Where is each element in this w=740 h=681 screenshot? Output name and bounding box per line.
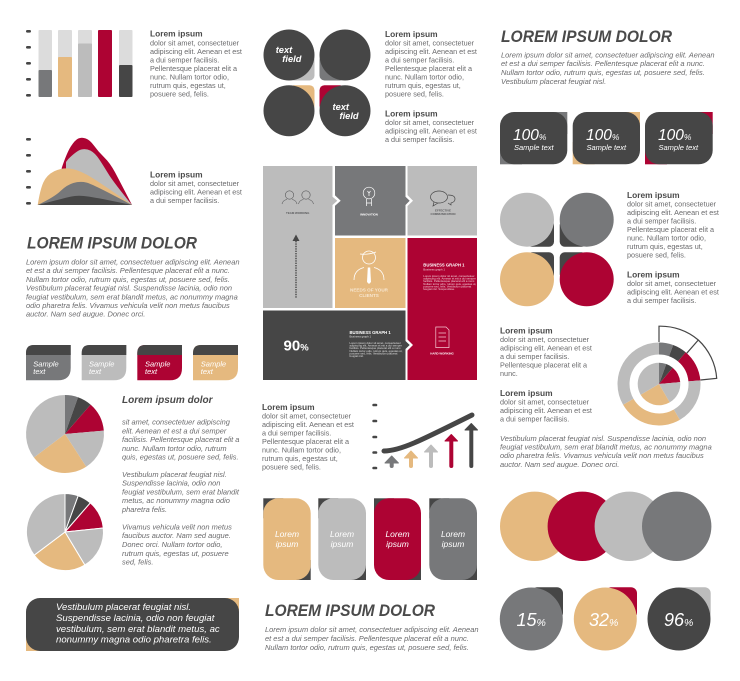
text block: growth chart description: dolor sit amet, consectetuer: [262, 412, 352, 420]
panel: process grid: [263, 166, 477, 380]
heading: top right title: LOREM IPSUM DOLOR: [501, 27, 672, 46]
text block: italic note: auctor. Nam sed augue. Donec orci.: [500, 460, 619, 469]
panel: business graph red: facilisis. Pellentesque placerat elit a nunc.: [423, 279, 475, 283]
panel: business graph red: Business graph 1: [423, 268, 445, 272]
sample text tabs: text: [33, 367, 46, 376]
sample text tabs: Sample: [201, 360, 226, 368]
arrow: team working to innovation: [332, 193, 341, 208]
text block: coloured circles description: dolor sit amet, consectetuer: [627, 200, 717, 208]
rounded lorem ipsum cards: Lorem: [385, 529, 410, 539]
sample text tabs: text: [201, 367, 214, 376]
four coloured circles: [500, 193, 614, 306]
text block: pie chart notes: nunc. Nullam tortor odio, rutrum: [122, 444, 227, 453]
panel: 90 percent: BUSINESS GRAPH 1: [350, 330, 391, 335]
text block: left paragraph: feugiat vestibulum, sem erat blandit metus, ac nonummy magna: [26, 292, 238, 301]
panel: 90 percent: Nullam tortor odio, rutrum quis, egestas ut,: [350, 349, 403, 353]
growth arrows chart: [372, 404, 478, 469]
panel: business graph red: Lorem ipsum dolor sit amet, consectetuer: [423, 274, 475, 278]
sample text tabs: Sample: [145, 360, 170, 368]
heading: bottom title: LOREM IPSUM DOLOR: [265, 601, 435, 620]
rounded lorem ipsum cards: Lorem: [275, 529, 299, 539]
text block: pie chart notes: Lorem ipsum dolor: [122, 395, 214, 406]
four dark circles: [264, 30, 370, 136]
text block: circles description: Lorem ipsum: [385, 29, 438, 39]
text block: pie chart notes: metus, ac nonummy magna odio: [122, 496, 230, 505]
text block: italic note: Vestibulum placerat feugiat nisl. Suspendisse lacinia, odio non: [500, 434, 706, 443]
text block: circles description: a dui semper facilisis.: [385, 135, 454, 144]
text block: top right paragraph: Lorem ipsum dolor sit amet, consectetuer adipiscing elit. Aenean: [501, 50, 715, 60]
text block: pie chart notes: Donec orci. Nullam tortor odio,: [122, 540, 222, 549]
percentage circles: [500, 587, 711, 650]
text block: bottom paragraph: et est a dui semper facilisis. Pellentesque placerat elit a nunc.: [265, 634, 469, 643]
text block: circles description: a dui semper facilisis.: [385, 56, 454, 64]
four dark circles: text: [332, 102, 350, 112]
heading: left title: LOREM IPSUM DOLOR: [27, 234, 197, 252]
panel: needs of your clients: [335, 238, 406, 308]
panel: team working: [263, 166, 332, 308]
stat tiles: 100 percent: Sample text: [586, 143, 627, 152]
text block: bar chart description: posuere sed, felis.: [150, 90, 209, 98]
stat tiles: 100 percent: 100%: [658, 127, 692, 144]
text block: coloured circles description: Lorem ipsum: [627, 190, 680, 200]
text block: pie chart notes: Vestibulum placerat feugiat nisl.: [122, 470, 227, 479]
pie chart: separated slices: [26, 493, 104, 571]
text block: bottom paragraph: Lorem ipsum dolor sit amet, consectetuer adipiscing elit. Aenean: [265, 625, 479, 634]
text block: bottom paragraph: Nullam tortor odio, rutrum quis, egestas ut, posuere sed, felis.: [265, 643, 469, 652]
text block: top right paragraph: Nullam tortor odio, rutrum quis, egestas ut, posuere sed, felis.: [501, 68, 705, 77]
stat tiles: 100 percent: [500, 112, 713, 164]
text block: top right paragraph: Vestibulum placerat feugiat nisl.: [501, 77, 606, 86]
text block: bottom paragraph: [265, 625, 479, 652]
text block: bar chart description: a dui semper facilisis.: [150, 56, 219, 64]
text block: area chart description: a dui semper facilisis.: [150, 196, 219, 205]
panel: business graph red: feugiat nisl. Suspendisse.: [423, 287, 455, 291]
text block: coloured circles description: adipiscing elit. Aenean et est: [627, 208, 719, 217]
panel: business graph red: BUSINESS GRAPH 1: [423, 263, 465, 268]
text block: coloured circles description: posuere sed, felis.: [627, 250, 686, 260]
text block: pie chart notes: facilisis. Pellentesque placerat elit a: [122, 435, 239, 444]
stat tiles: 100 percent: 100%: [586, 127, 620, 144]
panel: innovation: INNOVATION: [360, 212, 378, 216]
text block: left paragraph: [26, 257, 240, 319]
text block: left paragraph: Nullam tortor odio, rutrum quis, egestas ut, posuere sed, felis.: [26, 275, 230, 284]
text block: circles description: Pellentesque placerat elit a: [385, 64, 473, 73]
panel: business graph red: [408, 238, 477, 380]
text block: coloured circles description: rutrum quis, egestas ut,: [627, 242, 703, 251]
text block: circles description: rutrum quis, egestas ut,: [385, 81, 461, 90]
text block: growth chart description: a dui semper facilisis.: [262, 428, 331, 438]
text block: growth chart description: adipiscing elit. Aenean et est: [262, 420, 354, 429]
text block: bar chart description: Pellentesque placerat elit a: [150, 64, 238, 73]
percentage circles: 96%: [664, 610, 693, 630]
text block: pie chart notes: elit. Aenean et est a dui semper: [122, 426, 227, 435]
text block: bar chart description: [150, 28, 242, 98]
text block: growth chart description: posuere sed, felis.: [262, 462, 321, 472]
panel: 90 percent: Lorem ipsum dolor sit amet, consectetuer: [350, 341, 401, 345]
text block: bar chart description: rutrum quis, egestas ut,: [150, 81, 226, 90]
stat tiles: 100 percent: 100%: [513, 127, 547, 144]
text block: circles description: adipiscing elit. Aenean et est: [385, 126, 477, 136]
text block: pie chart notes: rutrum quis, egestas ut, posuere: [122, 549, 229, 558]
rounded lorem ipsum cards: Lorem: [330, 529, 354, 539]
panel: business graph red: posuere sed, felis. Vestibulum placerat: [423, 284, 471, 288]
callout: dark pill: [26, 598, 239, 651]
panel: needs of your clients: NEEDS OF YOUR: [350, 288, 389, 292]
callout: dark pill: nonummy magna odio pharetra felis.: [56, 635, 212, 646]
text block: pie chart notes: faucibus auctor. Nam sed augue.: [122, 531, 231, 540]
four dark circles: text: [276, 45, 293, 55]
text block: donut description: dolor sit amet, consectetuer: [500, 398, 590, 406]
text block: growth chart description: Pellentesque placerat elit a: [262, 437, 350, 446]
text block: circles description: dolor sit amet, consectetuer: [385, 118, 475, 127]
pie chart: solid: [26, 395, 104, 473]
text block: pie chart notes: Vivamus vehicula velit non metus: [122, 522, 232, 531]
text block: donut description: a dui semper facilisis.: [500, 352, 569, 361]
text block: area chart description: Lorem ipsum: [150, 170, 203, 180]
four dark circles: field: [282, 54, 302, 64]
callout: dark pill: Vestibulum placerat feugiat nisl.: [56, 602, 191, 613]
text block: circles description: posuere sed, felis.: [385, 90, 444, 98]
text block: coloured circles description: dolor sit amet, consectetuer: [627, 279, 717, 288]
text block: pie chart notes: Suspendisse lacinia, odio non: [122, 479, 220, 488]
text block: bar chart description: dolor sit amet, consectetuer: [150, 38, 240, 48]
callout: dark pill: Suspendisse lacinia, odio non feugiat: [56, 613, 215, 624]
text block: donut description: Pellentesque placerat elit a: [500, 360, 588, 370]
panel: business graph red: HARD WORKING: [430, 352, 454, 356]
panel: effective communication: [408, 166, 477, 236]
text block: area chart description: adipiscing elit. Aenean et est: [150, 188, 242, 196]
panel: 90 percent: adipiscing elit. Aenean et est a dui semper: [350, 344, 402, 348]
panel: 90 percent: 90%: [284, 338, 309, 354]
text block: growth chart description: nunc. Nullam tortor odio,: [262, 446, 341, 454]
panel: business graph red: Nullam tortor odio, rutrum quis, egestas ut,: [423, 282, 476, 286]
panel: innovation: [335, 166, 406, 236]
text block: growth chart description: rutrum quis, egestas ut,: [262, 454, 338, 463]
rounded lorem ipsum cards: ipsum: [331, 539, 353, 549]
percentage circles: 32%: [589, 610, 618, 630]
text block: donut description: dolor sit amet, consectetuer: [500, 335, 590, 344]
text block: italic note: odio pharetra felis. Vivamus vehicula velit non metus faucibus: [500, 451, 704, 460]
bar chart: [26, 30, 132, 97]
panel: effective communication: COMMUNICATION: [430, 212, 456, 216]
text block: left paragraph: Lorem ipsum dolor sit amet, consectetuer adipiscing elit. Aenean: [26, 257, 240, 266]
text block: pie chart notes: feugiat vestibulum, sem erat blandit: [122, 487, 240, 496]
text block: circles description: dolor sit amet, consectetuer: [385, 38, 475, 48]
text block: pie chart notes: [121, 395, 240, 567]
text block: pie chart notes: pharetra felis.: [121, 505, 167, 514]
text block: left paragraph: odio pharetra felis. Vivamus vehicula velit non metus faucibus: [26, 301, 230, 310]
sample text tabs: Sample: [33, 360, 59, 368]
text block: donut description: Lorem ipsum: [500, 388, 553, 398]
rounded lorem ipsum cards: ipsum: [386, 539, 409, 549]
sample text tabs: text: [89, 367, 102, 376]
sample text tabs: [26, 345, 238, 380]
sample text tabs: text: [145, 367, 158, 376]
text block: left paragraph: Vestibulum placerat feugiat nisl. Suspendisse lacinia, odio non: [26, 284, 232, 293]
text block: pie chart notes: sit amet, consectetuer adipiscing: [122, 418, 231, 426]
callout: dark pill: vestibulum, sem erat blandit metus, ac: [56, 624, 220, 635]
text block: italic note: [500, 434, 712, 469]
text block: circles description: Lorem ipsum: [385, 108, 438, 118]
donut chart: [624, 326, 717, 419]
text block: pie chart notes: sed, felis.: [122, 558, 153, 567]
panel: business graph red: adipiscing elit. Aenean et est a dui semper: [423, 277, 476, 281]
rounded lorem ipsum cards: ipsum: [276, 539, 298, 549]
text block: top right paragraph: et est a dui semper facilisis. Pellentesque placerat elit a nunc.: [501, 59, 705, 68]
text block: donut description: adipiscing elit. Aenean et est: [500, 344, 592, 352]
text block: donut description: Lorem ipsum: [500, 326, 553, 336]
text block: bar chart description: nunc. Nullam tortor odio,: [150, 72, 229, 82]
text block: growth chart description: Lorem ipsum: [262, 402, 315, 412]
percentage circles: 15%: [516, 610, 546, 630]
text block: coloured circles description: a dui semper facilisis.: [627, 296, 696, 305]
text block: pie chart notes: quis, egestas ut, posuere sed, felis.: [122, 453, 239, 462]
panel: 90 percent: [263, 310, 406, 380]
rounded lorem ipsum cards: [263, 498, 477, 580]
stat tiles: 100 percent: Sample text: [514, 143, 555, 152]
text block: bar chart description: Lorem ipsum: [150, 28, 203, 38]
text block: coloured circles description: Pellentesque placerat elit a: [627, 225, 715, 234]
text block: growth chart description: [262, 402, 354, 472]
text block: left paragraph: et est a dui semper facilisis. Pellentesque placerat elit a nunc.: [26, 266, 230, 275]
text block: donut description: a dui semper facilisis.: [500, 414, 569, 424]
text block: circles description: [385, 29, 477, 144]
area chart: [26, 138, 132, 205]
text block: donut description: adipiscing elit. Aenean et est: [500, 406, 592, 415]
four dark circles: field: [340, 111, 359, 121]
text block: coloured circles description: nunc. Nullam tortor odio,: [627, 234, 706, 242]
text block: bar chart description: adipiscing elit. Aenean et est: [150, 47, 242, 56]
sample text tabs: Sample: [89, 360, 114, 368]
text block: donut description: nunc.: [500, 369, 518, 378]
overlapping circles: [500, 492, 711, 561]
text block: area chart description: [150, 170, 242, 205]
text block: coloured circles description: adipiscing elit. Aenean et est: [627, 288, 719, 296]
text block: italic note: feugiat vestibulum, sem erat blandit metus, ac nonummy magna: [500, 443, 712, 452]
text block: donut description: [500, 326, 592, 424]
rounded lorem ipsum cards: Lorem: [441, 529, 465, 539]
panel: 90 percent: Business graph 1: [350, 334, 372, 338]
text block: circles description: adipiscing elit. Aenean et est: [385, 47, 477, 56]
text block: top right paragraph: [501, 50, 715, 86]
arrow: 90 percent to business graph: [406, 338, 413, 352]
panel: 90 percent: facilisis. Pellentesque placerat elit a nunc.: [350, 346, 401, 350]
text block: circles description: nunc. Nullam tortor odio,: [385, 72, 464, 82]
text block: coloured circles description: [627, 190, 719, 305]
panel: 90 percent: feugiat nisl.: [350, 354, 364, 358]
arrow: innovation to communication: [406, 193, 413, 208]
text block: left paragraph: auctor. Nam sed augue. Donec orci.: [26, 310, 145, 319]
text block: coloured circles description: Lorem ipsum: [627, 270, 680, 280]
panel: effective communication: EFFECTIVE: [435, 208, 451, 212]
rounded lorem ipsum cards: ipsum: [442, 539, 464, 549]
text block: coloured circles description: a dui semper facilisis.: [627, 216, 696, 226]
panel: needs of your clients: CLIENTS: [359, 293, 379, 298]
panel: team working: TEAM WORKING: [286, 211, 310, 215]
panel: 90 percent: posuere sed, felis. Vestibulum placerat: [350, 351, 398, 355]
stat tiles: 100 percent: Sample text: [658, 143, 699, 152]
text block: area chart description: dolor sit amet, consectetuer: [150, 179, 240, 188]
